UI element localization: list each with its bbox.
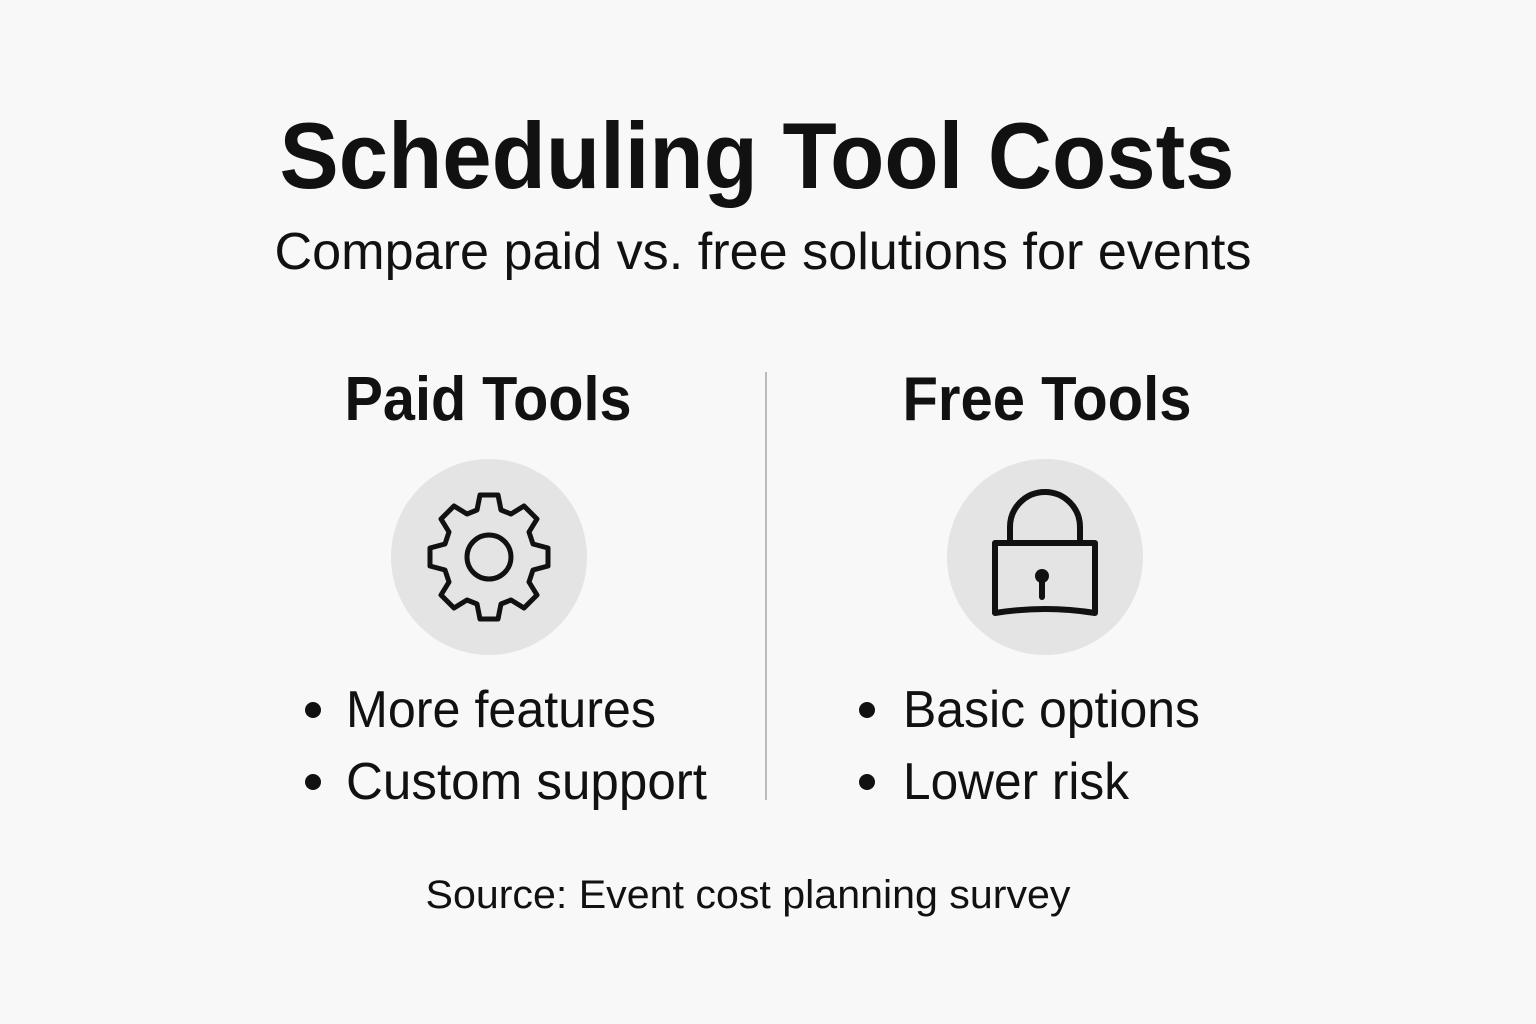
bullet list: paid [305,681,708,811]
heading: free tools: Free Tools [902,365,1192,434]
bullet list: free: Basic options [903,681,1200,739]
title: Scheduling Tool Costs [280,103,1234,208]
icon: padlock [947,459,1143,655]
subtitle: Compare paid vs. free solutions for events [274,223,1252,281]
panel: free tools [859,365,1200,811]
source note: Source: Event cost planning survey [426,873,1070,917]
bullet list: free [859,681,1200,811]
bullet list: paid: More features [346,681,656,739]
icon: gear [391,459,587,655]
bullet list: paid: Custom support [346,753,708,811]
panel: paid tools [305,365,708,811]
bullet list: free: Lower risk [903,753,1130,811]
heading: paid tools: Paid Tools [344,365,632,434]
